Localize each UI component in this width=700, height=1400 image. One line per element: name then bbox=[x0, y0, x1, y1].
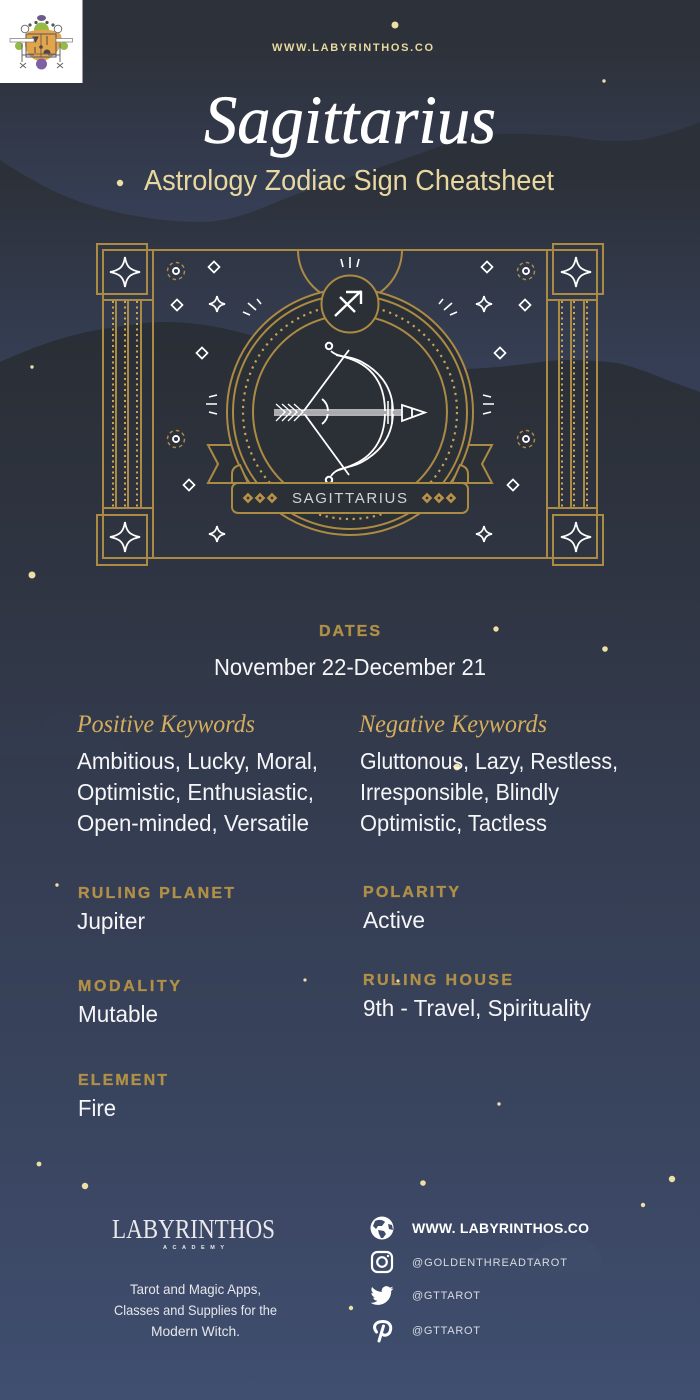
positive keywords: Open-minded, Versatile bbox=[77, 810, 309, 836]
dates block bbox=[214, 623, 486, 680]
footer tagline: Tarot and Magic Apps, bbox=[130, 1281, 261, 1297]
negative keywords bbox=[358, 711, 618, 836]
element: Fire bbox=[78, 1095, 116, 1121]
element bbox=[78, 1072, 167, 1121]
ruling house bbox=[363, 972, 591, 1021]
zodiac emblem panel bbox=[97, 244, 603, 565]
polarity: Active bbox=[363, 907, 425, 933]
sagittarius glyph badge bbox=[322, 276, 378, 332]
modality: MODALITY bbox=[78, 978, 180, 995]
footer social links: @GTTAROT bbox=[412, 1325, 480, 1337]
footer social links: @GTTAROT bbox=[412, 1290, 480, 1302]
right pillar bbox=[547, 244, 603, 565]
subtitle: Astrology Zodiac Sign Cheatsheet bbox=[144, 165, 554, 197]
main medallion rings bbox=[227, 289, 473, 535]
negative keywords: Irresponsible, Blindly bbox=[360, 779, 559, 805]
dates block: DATES bbox=[319, 623, 380, 640]
polarity bbox=[363, 884, 459, 933]
positive keywords: Positive Keywords bbox=[76, 711, 255, 738]
footer tagline: Modern Witch. bbox=[151, 1323, 240, 1339]
element: ELEMENT bbox=[78, 1072, 167, 1089]
dates block: November 22-December 21 bbox=[214, 654, 486, 680]
rays bbox=[206, 257, 494, 414]
title: Sagittarius bbox=[204, 82, 496, 158]
header url: WWW.LABYRINTHOS.CO bbox=[272, 42, 433, 54]
footer tagline: Classes and Supplies for the bbox=[114, 1302, 277, 1318]
small four-point stars bbox=[209, 296, 492, 542]
frame lines bbox=[153, 250, 547, 558]
positive keywords bbox=[76, 711, 318, 836]
left pillar bbox=[97, 244, 153, 565]
footer social links bbox=[412, 1220, 589, 1337]
footer social links: @GOLDENTHREADTAROT bbox=[412, 1257, 567, 1269]
ruling planet: Jupiter bbox=[77, 908, 145, 934]
positive keywords: Optimistic, Enthusiastic, bbox=[77, 779, 314, 805]
icon: globe bbox=[370, 1216, 394, 1240]
corner stars bbox=[110, 257, 591, 552]
negative keywords: Gluttonous, Lazy, Restless, bbox=[360, 748, 618, 774]
top semicircle bbox=[298, 250, 402, 302]
ruling house: RULING HOUSE bbox=[363, 972, 512, 989]
ruling house: 9th - Travel, Spirituality bbox=[363, 995, 591, 1021]
footer tagline bbox=[114, 1281, 277, 1339]
dashed gold circles bbox=[168, 262, 534, 448]
negative keywords: Optimistic, Tactless bbox=[360, 810, 547, 836]
icon: twitter bbox=[370, 1286, 394, 1305]
icon: instagram bbox=[372, 1252, 392, 1272]
negative keywords: Negative Keywords bbox=[358, 711, 547, 738]
ribbon tails bbox=[208, 445, 492, 483]
footer social links: WWW. LABYRINTHOS.CO bbox=[412, 1220, 589, 1236]
bow and arrow bbox=[274, 343, 425, 483]
icon: pinterest bbox=[375, 1322, 391, 1341]
banner label: SAGITTARIUS bbox=[292, 490, 407, 507]
footer brand logo: LABYRINTHOS bbox=[112, 1214, 275, 1244]
positive keywords: Ambitious, Lucky, Moral, bbox=[77, 748, 318, 774]
footer brand logo: ACADEMY bbox=[163, 1245, 224, 1251]
logo badge bbox=[0, 0, 82, 83]
modality: Mutable bbox=[78, 1001, 158, 1027]
polarity: POLARITY bbox=[363, 884, 459, 901]
ruling planet: RULING PLANET bbox=[78, 885, 234, 902]
ribbon banner bbox=[232, 465, 468, 513]
small white diamonds bbox=[172, 262, 530, 490]
modality bbox=[78, 978, 180, 1027]
ruling planet bbox=[77, 885, 234, 934]
